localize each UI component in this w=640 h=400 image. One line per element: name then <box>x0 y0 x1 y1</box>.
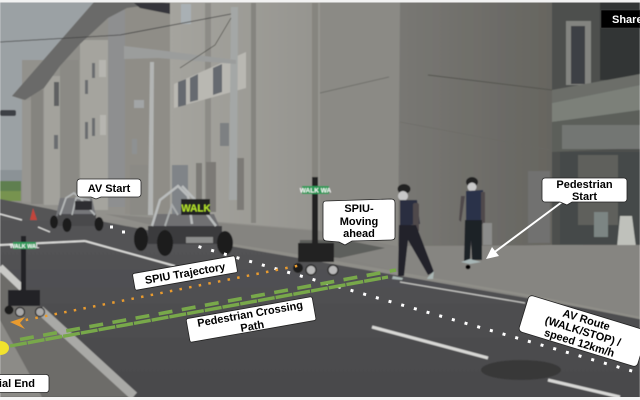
SPIU robot at trial end <box>4 236 44 316</box>
pedestrian walking <box>392 184 434 280</box>
label: SPIU-Moving ahead: ahead <box>343 228 375 240</box>
label: AV Route: speed 12km/h <box>543 327 616 360</box>
traffic light far left <box>0 110 16 116</box>
AV route dotted line <box>110 226 640 373</box>
pedestrian standing <box>459 177 485 269</box>
sky <box>0 2 94 180</box>
arrow: pedestrian start <box>486 202 562 259</box>
label: SPIU-Moving ahead <box>323 199 395 245</box>
distant trees and grass <box>0 170 22 201</box>
trial end marker <box>0 341 9 355</box>
label: Pedestrian Start: Start <box>572 191 597 203</box>
far kerb <box>232 245 640 318</box>
label: AV Route <box>518 295 640 367</box>
near sidewalk <box>0 268 135 397</box>
gravel strip <box>298 240 385 258</box>
manhole <box>481 360 561 380</box>
large dark wall <box>320 2 402 257</box>
grey door <box>528 171 550 243</box>
AV vehicle far <box>50 193 104 232</box>
overhead poles and wires <box>0 7 238 215</box>
label: Pedestrian Crossing Path <box>186 297 316 344</box>
roof overhang <box>12 2 170 100</box>
label: AV Route: AV Route <box>561 308 611 333</box>
central building block <box>170 2 323 230</box>
traffic cone <box>30 208 37 220</box>
pavement <box>105 214 640 320</box>
label: SPIU Trajectory: SPIU Trajectory <box>144 261 227 287</box>
label: SPIU-Moving ahead: SPIU- <box>344 203 374 215</box>
SPIU robot at trial end: WALK WAL <box>10 244 40 250</box>
trash bin <box>483 223 492 245</box>
label: AV Start <box>77 179 141 199</box>
SPIU trajectory dotted line <box>10 266 298 329</box>
label: AV Route: (WALK/STOP) / <box>543 315 622 349</box>
AV vehicle near with WALK display <box>134 186 233 256</box>
AV vehicle near with WALK display: WALK <box>181 204 211 214</box>
label: SPIU Trajectory <box>132 256 238 290</box>
label: Pedestrian Start <box>542 178 627 205</box>
sign board <box>617 216 636 247</box>
label: SPIU-Moving ahead: Moving <box>340 216 378 228</box>
label: Shared <box>601 10 640 28</box>
SPIU robot near pedestrians <box>293 177 338 275</box>
SPIU robot near pedestrians: WALK WA <box>300 188 332 194</box>
central block windows <box>172 4 246 215</box>
label: Trial End <box>0 374 49 392</box>
label: Pedestrian Crossing Path: Pedestrian Crossing <box>196 299 304 330</box>
pedestrian crossing path <box>10 270 396 346</box>
label: AV Start: AV Start <box>88 183 131 195</box>
near kerb <box>0 267 22 288</box>
road markings <box>0 214 620 397</box>
road surface <box>0 199 640 400</box>
left building wing <box>22 4 170 220</box>
right entrance glass facade <box>552 2 640 245</box>
label: Pedestrian Crossing Path: Path <box>240 319 265 335</box>
label: Pedestrian Start: Pedestrian <box>556 179 613 191</box>
